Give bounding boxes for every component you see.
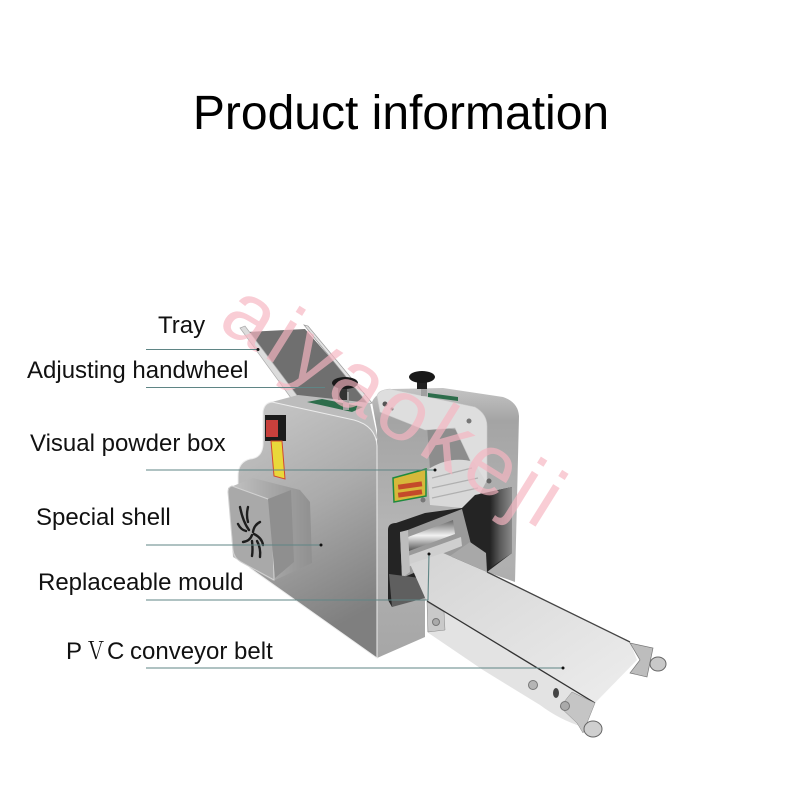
machine illustration bbox=[228, 325, 666, 737]
label: PVC conveyor belt: conveyor belt bbox=[130, 638, 273, 665]
label: PVC conveyor belt: Ⅴ bbox=[84, 639, 108, 665]
plate and powder box bbox=[377, 389, 492, 508]
label: PVC conveyor belt bbox=[66, 638, 564, 670]
label: replaceable mould: Replaceable mould bbox=[38, 569, 243, 596]
title: Product information bbox=[193, 87, 609, 140]
side panel with curved corner bbox=[238, 402, 377, 658]
watermark: aiyaokeji bbox=[206, 262, 586, 549]
front and right body shell bbox=[372, 388, 519, 658]
label: adjusting handwheel: Adjusting handwheel bbox=[27, 357, 248, 384]
adjusting knobs bbox=[307, 371, 458, 412]
mould opening bbox=[388, 487, 512, 607]
label: tray: Tray bbox=[158, 312, 205, 339]
label: PVC conveyor belt: C bbox=[107, 638, 124, 665]
label: special shell bbox=[36, 504, 322, 546]
tray bbox=[240, 325, 372, 404]
conveyor belt bbox=[410, 553, 666, 737]
label: visual powder box bbox=[30, 430, 436, 472]
label: special shell: Special shell bbox=[36, 504, 171, 531]
label: replaceable mould bbox=[38, 552, 430, 600]
top surface bbox=[268, 395, 378, 440]
warning label bbox=[393, 469, 426, 502]
motor cover bbox=[228, 478, 312, 581]
power switch and warning strip bbox=[265, 415, 286, 479]
label: visual powder box: Visual powder box bbox=[30, 430, 226, 457]
icon: fan vents bbox=[238, 507, 263, 557]
label: tray bbox=[146, 312, 260, 351]
label: PVC conveyor belt: P bbox=[66, 638, 82, 665]
